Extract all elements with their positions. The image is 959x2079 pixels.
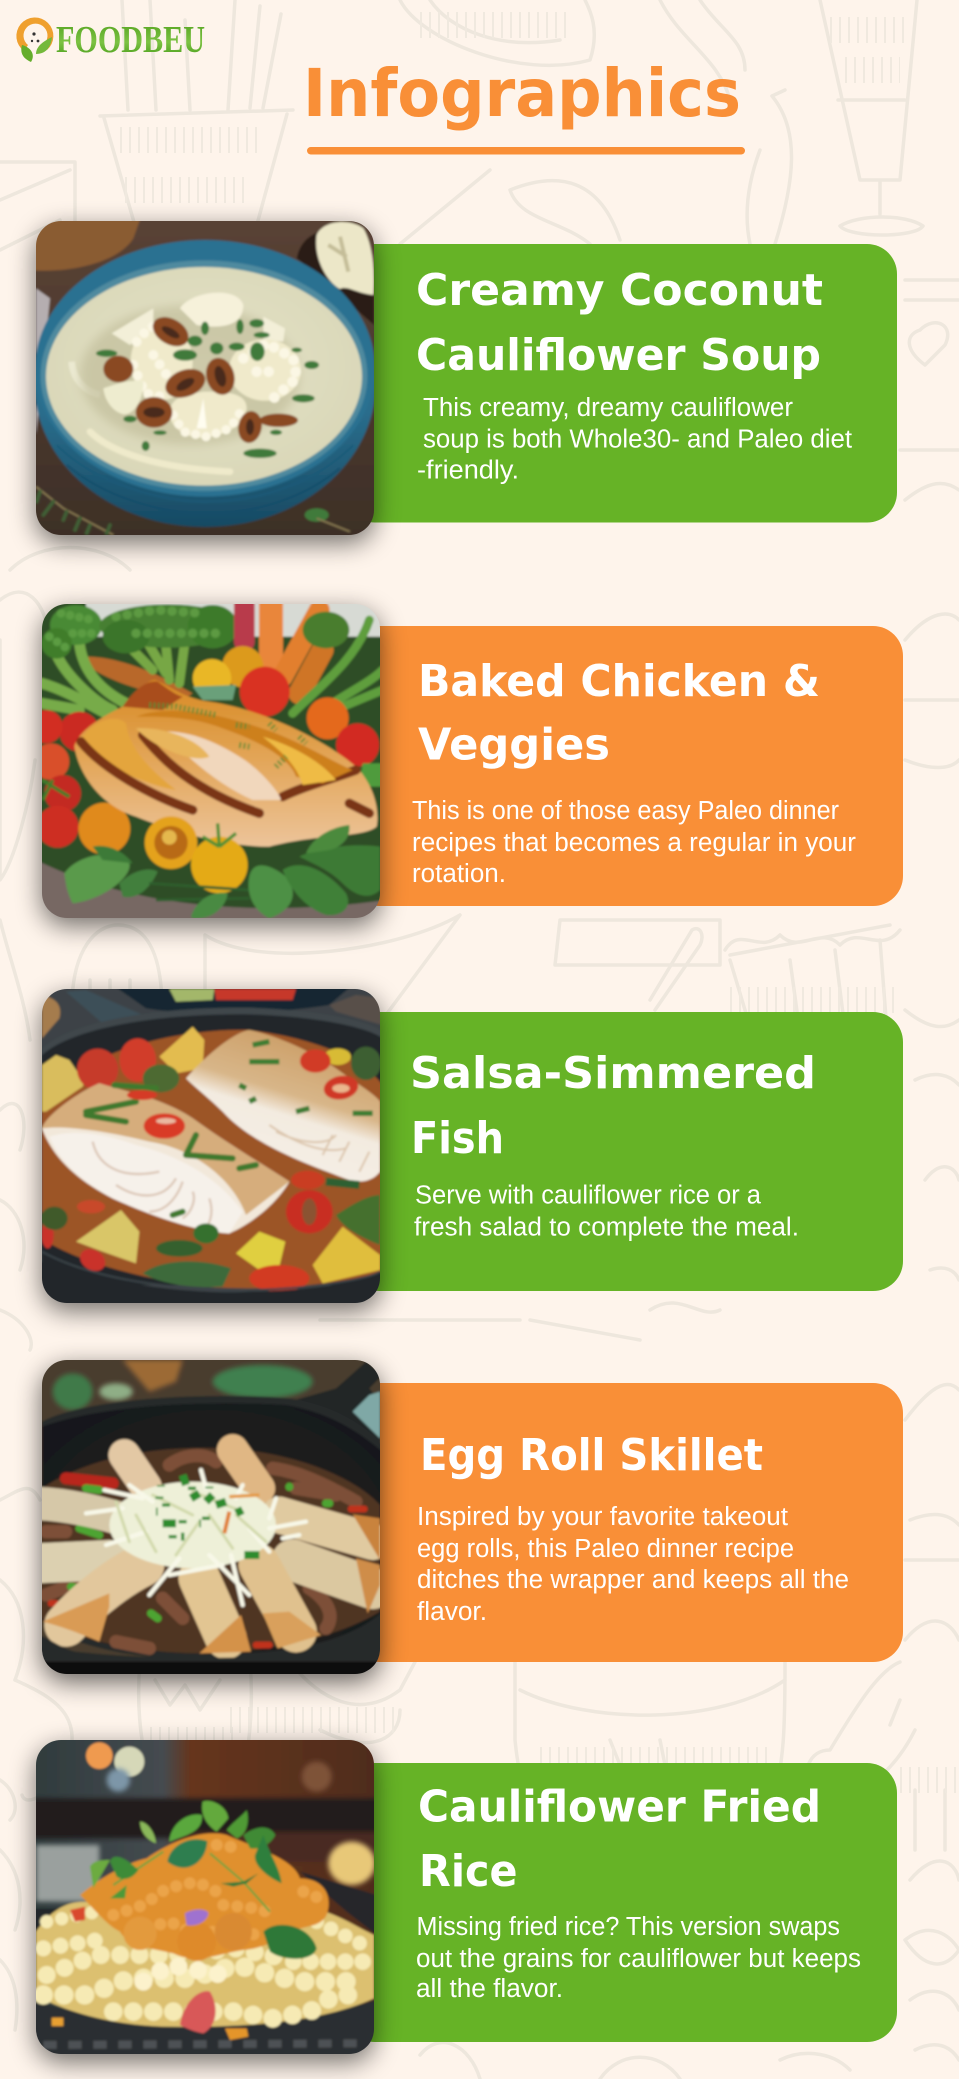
card: green bbox=[350, 1012, 903, 1291]
description: flavor. bbox=[417, 1598, 487, 1626]
heading: Fish bbox=[411, 1113, 504, 1164]
description: recipes that becomes a regular in your bbox=[412, 829, 857, 857]
panel: Creamy Coconut Cauliflower Soup bbox=[30, 215, 897, 543]
panel: Cauliflower Fried Rice bbox=[30, 1735, 897, 2062]
description: This is one of those easy Paleo dinner bbox=[412, 797, 840, 825]
description bbox=[414, 1182, 799, 1242]
logo icon: orange ring with green leaves bbox=[16, 18, 53, 62]
photo: cauliflower fried rice bbox=[30, 1735, 380, 2060]
description: Inspired by your favorite takeout bbox=[417, 1503, 788, 1531]
description: soup is both Whole30- and Paleo diet bbox=[423, 426, 852, 454]
heading bbox=[410, 1048, 816, 1164]
panel: Salsa-Simmered Fish bbox=[29, 985, 903, 1312]
photo: cauliflower soup in blue bowl bbox=[30, 215, 380, 540]
description: Serve with cauliflower rice or a bbox=[415, 1182, 762, 1210]
card: green bbox=[345, 244, 897, 522]
card: orange bbox=[350, 1383, 903, 1662]
card: green bbox=[345, 1763, 897, 2042]
photo: baked chicken with vegetables bbox=[29, 600, 386, 925]
description: ditches the wrapper and keeps all the bbox=[417, 1566, 849, 1594]
description: This creamy, dreamy cauliflower bbox=[423, 394, 794, 422]
description bbox=[417, 1503, 849, 1626]
heading: Veggies bbox=[418, 720, 610, 770]
panel: Baked Chicken & Veggies bbox=[29, 600, 903, 926]
card: orange bbox=[350, 626, 903, 906]
panel: Egg Roll Skillet bbox=[29, 1355, 903, 1685]
logo wordmark: FOODBEU bbox=[56, 19, 205, 61]
heading: Salsa-Simmered bbox=[410, 1048, 816, 1099]
heading: Cauliflower Soup bbox=[416, 330, 821, 381]
heading bbox=[418, 1782, 821, 1897]
description: out the grains for cauliflower but keeps bbox=[416, 1945, 861, 1973]
description: egg rolls, this Paleo dinner recipe bbox=[417, 1535, 794, 1563]
heading: Egg Roll Skillet bbox=[420, 1430, 763, 1481]
description: all the flavor. bbox=[416, 1975, 563, 2003]
description: -friendly. bbox=[417, 456, 519, 484]
title underline bbox=[307, 147, 745, 154]
heading: Cauliflower Fried bbox=[418, 1782, 821, 1832]
description: Missing fried rice? This version swaps bbox=[416, 1913, 840, 1941]
heading: Creamy Coconut bbox=[416, 265, 823, 316]
description bbox=[412, 797, 857, 888]
description: fresh salad to complete the meal. bbox=[414, 1214, 799, 1242]
heading: Rice bbox=[419, 1846, 518, 1897]
title: Infographics bbox=[303, 55, 741, 132]
description: rotation. bbox=[412, 860, 506, 888]
photo: egg roll skillet bbox=[42, 1360, 380, 1674]
description bbox=[417, 394, 852, 484]
heading bbox=[416, 265, 823, 381]
heading bbox=[418, 656, 820, 770]
description bbox=[416, 1913, 861, 2003]
logo: FOODBEU bbox=[16, 18, 205, 62]
photo: fish fillets in salsa skillet bbox=[42, 989, 380, 1303]
heading: Baked Chicken & bbox=[418, 656, 820, 707]
